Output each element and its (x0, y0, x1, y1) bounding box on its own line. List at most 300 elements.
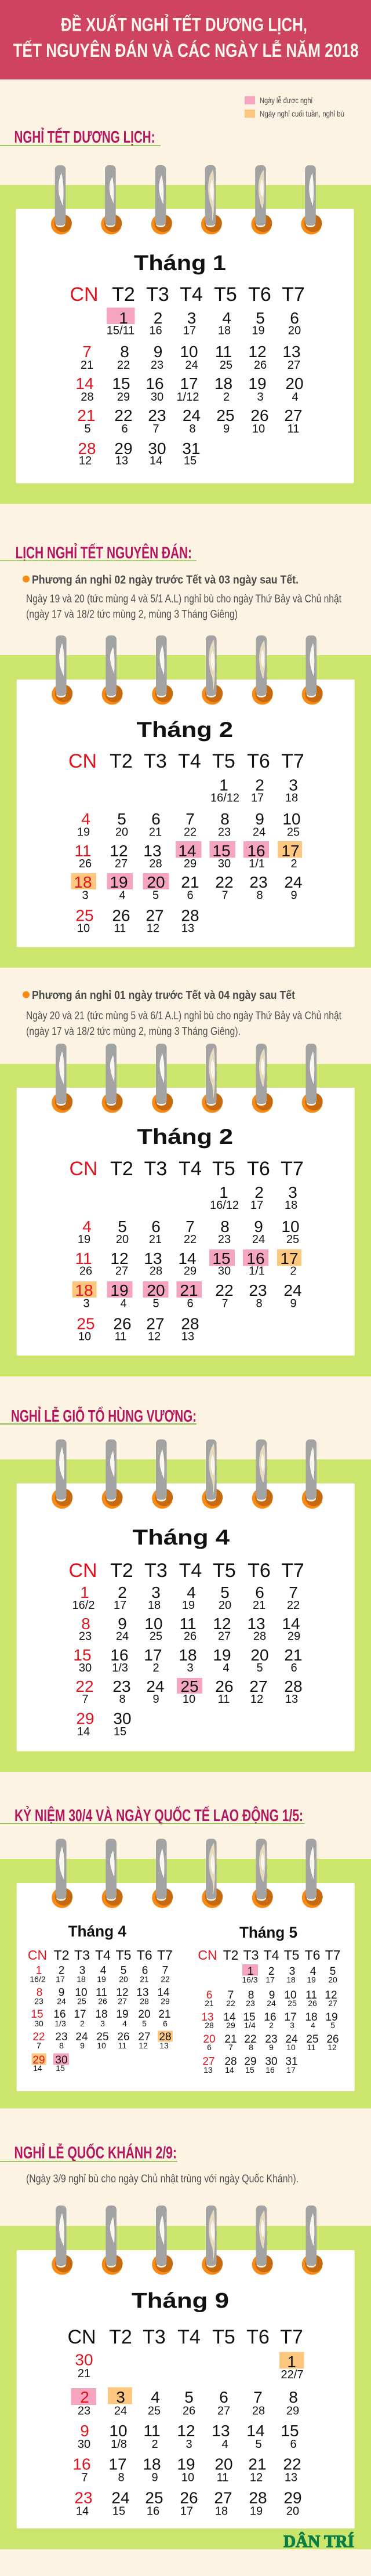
weekday header: T7 (282, 284, 305, 306)
date grid: 19 (97, 1975, 106, 1984)
weekday header: T7 (281, 750, 304, 772)
date grid: 21 (149, 826, 162, 838)
date grid: 7 (186, 1218, 195, 1236)
rings (51, 165, 322, 234)
date grid: 20 (147, 873, 165, 891)
date grid: 13 (181, 922, 194, 935)
date grid: 14 (178, 842, 197, 860)
date grid: 3 (289, 1965, 295, 1978)
date grid: 25 (286, 1233, 299, 1246)
date grid: 13 (136, 1986, 149, 1999)
date grid: 24 (146, 1677, 165, 1695)
date grid: 17 (180, 375, 198, 393)
date grid: 20 (219, 1599, 231, 1612)
date grid: 9 (254, 1218, 263, 1236)
weekday header: CN (67, 2326, 96, 2348)
date grid: 5 (142, 2019, 147, 2028)
date grid: 14 (282, 1615, 300, 1633)
date grid: 14 (246, 2422, 265, 2440)
date grid: 10 (78, 1330, 91, 1343)
date grid: 22 (244, 2033, 257, 2045)
date grid: 22 (226, 1999, 235, 2008)
date grid: 20 (285, 375, 304, 393)
date grid (72, 2350, 303, 2517)
date grid: 28 (159, 2031, 172, 2043)
weekday header: T4 (264, 1948, 279, 1963)
date grid: 23 (218, 1233, 231, 1246)
date grid: 30 (218, 858, 231, 870)
date grid: 2 (254, 1183, 264, 1201)
date grid: 30 (218, 1265, 231, 1278)
date grid: 13 (203, 2065, 213, 2074)
date grid: 31 (182, 439, 201, 457)
date grid: 30 (34, 2019, 43, 2028)
date grid (74, 776, 303, 935)
weekday header: T3 (243, 1948, 259, 1963)
date grid: 26 (183, 2405, 195, 2418)
date grid: 28 (140, 1997, 149, 2006)
date grid: 25 (306, 2033, 319, 2045)
date grid: 28 (224, 2056, 237, 2068)
date grid: 24 (111, 2488, 130, 2507)
date grid: 4 (223, 1662, 230, 1674)
date grid: 10 (77, 922, 90, 935)
date grid: 19 (116, 2008, 129, 2021)
date grid: 14 (178, 1249, 197, 1267)
date grid: 22 (161, 1975, 170, 1984)
date grid: 6 (255, 1583, 264, 1601)
date grid: 28 (205, 2021, 214, 2030)
date grid: 29 (161, 1997, 170, 2006)
date grid: 24 (285, 2033, 298, 2045)
date grid: 11 (74, 842, 92, 860)
date grid: 14 (150, 455, 162, 467)
date grid: 27 (115, 1265, 128, 1278)
date grid: 20 (288, 325, 301, 337)
date grid: 6 (151, 1218, 161, 1236)
option 2 text (23, 989, 342, 1038)
weekday header: T2 (54, 1948, 69, 1963)
heading: Lịch nghỉ Tết Nguyên đán: LỊCH NGHỈ TẾT NGUYÊN ĐÁN: (15, 543, 192, 562)
date grid: 26 (98, 1997, 107, 2006)
highlighted days (71, 2352, 304, 2405)
date grid: 2 (152, 1662, 159, 1674)
date grid: 10 (97, 2041, 106, 2050)
date grid: 8 (189, 423, 196, 435)
date grid: 3 (290, 2021, 294, 2030)
date grid: 21 (253, 1599, 265, 1612)
date grid: 16/3 (242, 1975, 258, 1985)
date grid: 5 (256, 1662, 263, 1674)
date grid: 17 (265, 1975, 275, 1985)
date grid: 11 (143, 2422, 161, 2440)
date grid: 13 (159, 2041, 169, 2050)
date grid: 26 (117, 2031, 130, 2043)
highlight: 25 April (177, 1678, 202, 1694)
date grid: 8 (59, 2041, 64, 2050)
date grid: 26 (79, 1265, 92, 1278)
date grid: 7 (253, 2388, 263, 2406)
date grid: 3 (116, 2388, 125, 2406)
date grid: 12 (250, 1693, 263, 1706)
date grid: 27 (218, 1630, 231, 1643)
weekday header: T5 (116, 1948, 131, 1963)
date grid: 10 (109, 2422, 128, 2440)
date grid: 23 (74, 2488, 93, 2507)
date grid: 30 (265, 2056, 278, 2068)
date grid: 12 (79, 455, 92, 467)
date grid: 15 (212, 1249, 231, 1267)
date grid: 29 (114, 439, 133, 457)
date grid: 19 (325, 2011, 338, 2023)
date grid: 16 (246, 1249, 265, 1267)
date grid: 18 (218, 325, 231, 337)
date grid: 27 (284, 406, 303, 424)
date grid: 19 (213, 1646, 231, 1664)
date grid: 21 (248, 2455, 267, 2473)
date grid: 9 (59, 1986, 64, 1999)
date grid: 11 (75, 1249, 92, 1267)
date grid: 23 (34, 1997, 43, 2006)
weekday header: CN (28, 1948, 47, 1963)
date grid: 16/12 (210, 792, 239, 805)
date grid: 9 (152, 1693, 159, 1706)
date grid: 13 (285, 2471, 297, 2484)
date grid: 27 (217, 2405, 230, 2418)
heading: Nghỉ Tết Dương lịch: NGHỈ TẾT DƯƠNG LỊCH: (14, 127, 155, 147)
date grid: 6 (121, 423, 128, 435)
date grid: 23 (112, 1677, 131, 1695)
date grid: 2 (151, 2438, 158, 2451)
date grid: 23 (249, 873, 268, 891)
date grid: 12 (325, 1989, 337, 2001)
date grid: 28 (78, 439, 96, 457)
weekday header: CN (70, 284, 99, 306)
date grid: 23 (265, 2033, 278, 2045)
date grid: 7 (162, 1964, 168, 1977)
date grid: 3 (187, 1662, 194, 1674)
weekday header: T5 (212, 2326, 235, 2348)
date grid: 30 (78, 2438, 90, 2451)
date grid: 21 (158, 2008, 171, 2021)
date grid: 21 (77, 406, 96, 424)
date grid: 18 (285, 792, 298, 805)
date grid: 1 (287, 2353, 296, 2371)
date grid: 24 (57, 1997, 66, 2006)
date grid: 19 (252, 325, 265, 337)
option 1 text: (ngày 17 và 18/2 tức mùng 2, mùng 3 Tháng Giêng) (26, 609, 238, 620)
date grid: 26 (184, 1630, 197, 1643)
date grid: 13 (201, 2011, 214, 2023)
legend (245, 96, 344, 118)
date grid: 2 (290, 1265, 297, 1278)
highlighted days (71, 841, 302, 889)
date grid: 20 (147, 1281, 165, 1299)
date grid: 2 (255, 776, 264, 794)
date grid: 11 (307, 2043, 315, 2052)
date grid: 22 (215, 1281, 234, 1299)
weekday header: T4 (180, 284, 203, 306)
weekday header: CN (69, 1158, 98, 1180)
date grid: 31 (285, 2056, 298, 2068)
date grid: 30 (55, 2054, 68, 2066)
date grid: 5 (330, 2021, 335, 2030)
date grid: 18 (286, 1975, 296, 1985)
date grid: 25 (77, 1315, 95, 1332)
date grid: 9 (269, 1989, 275, 2001)
date grid: 10 (282, 810, 301, 828)
date grid: 12 (110, 1249, 129, 1267)
date grid: 11 (288, 423, 299, 435)
date grid: 12 (248, 343, 267, 361)
date grid: 1/3 (112, 1662, 128, 1674)
note: National Day compensation: (Ngày 3/9 nghỉ bù cho ngày Chủ nhật trùng với ngày Quốc Khánh). (26, 2173, 299, 2185)
date grid: 29 (244, 2056, 257, 2068)
date grid: 8 (118, 2471, 125, 2484)
date grid: 13 (285, 1693, 298, 1706)
date grid: 15 (245, 2065, 254, 2074)
date grid: 11 (96, 1986, 107, 1999)
date grid: 23 (148, 406, 166, 424)
date grid: 28 (181, 907, 199, 924)
date grid: 27 (214, 2488, 232, 2507)
date grid: 15 (112, 375, 130, 393)
weekday header (68, 750, 304, 772)
date grid: 24 (116, 1630, 129, 1643)
date grid: 8 (37, 1986, 42, 1999)
date grid (75, 1183, 302, 1343)
date grid: 11 (217, 2471, 228, 2484)
date grid: 25 (180, 1677, 199, 1695)
date grid: 12 (213, 1615, 231, 1633)
date grid: 5 (152, 889, 159, 902)
date grid: 7 (81, 2471, 88, 2484)
date grid: 2 (290, 858, 297, 870)
date grid: 5 (117, 810, 126, 828)
date grid: 5 (152, 1298, 159, 1310)
date grid: 10 (183, 1693, 195, 1706)
date grid: 2 (154, 309, 162, 327)
date grid: 29 (117, 391, 130, 404)
date grid: 19 (307, 1975, 316, 1985)
date grid: 11 (179, 1615, 197, 1633)
date grid: 30 (79, 1662, 92, 1674)
date grid: 5 (255, 2438, 262, 2451)
date grid: 5 (121, 1964, 126, 1977)
date grid: 7 (228, 1989, 234, 2001)
date grid: 9 (154, 343, 162, 361)
date grid: 3 (288, 1183, 297, 1201)
date grid: 25 (75, 907, 94, 924)
weekday header: T7 (157, 1948, 173, 1963)
date grid: 16 (53, 2008, 66, 2021)
date grid: 19 (110, 873, 128, 891)
date grid: 22 (287, 1599, 300, 1612)
date grid: 21 (149, 1233, 162, 1246)
date grid: 19 (177, 2455, 195, 2473)
date grid: 3 (151, 1583, 161, 1601)
date grid: 16 (265, 2065, 275, 2074)
date grid: 15 (31, 2008, 43, 2021)
date grid: 29 (76, 1709, 94, 1728)
date grid: 27 (146, 1315, 165, 1332)
date grid: 6 (290, 309, 299, 327)
weekday header: T2 (110, 1158, 133, 1180)
date grid: 8 (220, 810, 230, 828)
weekday header: T3 (143, 2326, 166, 2348)
date grid: 2 (80, 2388, 89, 2406)
weekday header: CN (198, 1948, 217, 1963)
weekday header: T6 (137, 1948, 152, 1963)
date grid: 11 (215, 343, 232, 361)
date grid: 17 (144, 1646, 162, 1664)
date grid: 10 (284, 1989, 297, 2001)
date grid: 16/12 (210, 1199, 239, 1212)
date grid: 20 (203, 2033, 216, 2045)
weekday header: CN (68, 750, 97, 772)
date grid: 26 (308, 1999, 317, 2008)
date grid: 6 (142, 1964, 148, 1977)
date grid: 12 (250, 2471, 263, 2484)
date grid: 18 (214, 375, 232, 393)
date grid: 20 (286, 2505, 299, 2517)
date grid: 30 (75, 2350, 93, 2369)
date grid: 7 (221, 889, 228, 902)
date grid: 14 (223, 2011, 236, 2023)
option 1 text: Phương án nghỉ 02 ngày trước Tết và 03 ngày sau Tết. (32, 574, 299, 587)
date grid: 15 (243, 2011, 256, 2023)
month title: Tháng 2 (137, 718, 233, 742)
date grid: 11 (114, 922, 126, 935)
date grid: 21 (205, 1999, 214, 2008)
date grid: 3 (100, 2019, 105, 2028)
date grid: 4 (222, 309, 231, 327)
date grid: 26 (326, 2033, 339, 2045)
date grid: 22 (75, 1677, 94, 1695)
date grid: 11 (115, 1330, 126, 1343)
date grid: 1 (219, 776, 228, 794)
option 1 text (23, 574, 342, 620)
date grid: 20 (119, 1975, 128, 1984)
date grid: 24 (183, 406, 201, 424)
date grid: 18 (95, 2008, 108, 2021)
date grid: 3 (79, 1964, 85, 1977)
date grid: 26 (180, 2488, 198, 2507)
date grid: 27 (249, 1677, 268, 1695)
weekday header: CN (68, 1560, 97, 1582)
option 2 text: (ngày 17 và 18/2 tức mùng 2, mùng 3 Tháng Giêng). (26, 1026, 241, 1038)
date grid: 10 (286, 2043, 296, 2052)
date grid: 13 (247, 1615, 265, 1633)
date grid: 10 (180, 343, 198, 361)
date grid: 7 (82, 343, 92, 361)
date grid: 5 (256, 309, 265, 327)
date grid: 8 (81, 1615, 90, 1633)
date grid: 10 (181, 2471, 194, 2484)
date grid: 21 (224, 2033, 237, 2045)
date grid: 16 (264, 2011, 277, 2023)
month title: Tháng 5 (239, 1924, 297, 1941)
date grid: 4 (151, 2388, 160, 2406)
highlight: 1 January (107, 307, 134, 324)
date grid: 24 (114, 2405, 127, 2418)
weekday header (28, 1948, 173, 1963)
date grid: 23 (78, 2405, 90, 2418)
date grid: 15 (184, 455, 197, 467)
heading: Nghỉ lễ Giỗ Tổ Hùng Vương: NGHỈ LỄ GIỖ TỔ HÙNG VƯƠNG: (11, 1406, 197, 1426)
date grid: 22 (114, 406, 133, 424)
date grid: 18 (285, 1199, 297, 1212)
date grid: 19 (182, 1599, 195, 1612)
date grid: 13 (181, 1330, 194, 1343)
date grid: 29 (184, 858, 197, 870)
date grid: 6 (151, 810, 161, 828)
date grid: 9 (255, 810, 264, 828)
date grid: 14 (225, 2065, 234, 2074)
date grid: 20 (138, 2008, 151, 2021)
weekday header: T2 (110, 1560, 133, 1582)
date grid: 8 (120, 343, 129, 361)
date grid: 27 (328, 1999, 337, 2008)
date grid: 11 (218, 1693, 230, 1706)
date grid: 12 (147, 922, 159, 935)
date grid: 1/3 (54, 2019, 66, 2028)
date grid: 22 (215, 873, 234, 891)
highlighted days (72, 1249, 301, 1298)
date grid: 5 (84, 423, 91, 435)
date grid: 18 (179, 1646, 197, 1664)
weekday header: T3 (144, 1560, 168, 1582)
date grid: 24 (283, 1281, 302, 1299)
weekday header: T2 (109, 2326, 132, 2348)
date grid: 1/4 (244, 2021, 256, 2030)
date grid: 23 (249, 1281, 267, 1299)
date grid: 15 (114, 1725, 126, 1738)
date grid: 13 (115, 455, 128, 467)
date grid: 6 (207, 2043, 212, 2052)
date grid: 21 (140, 1975, 149, 1984)
panel: September calendar (0, 2206, 371, 2551)
weekday header: T7 (325, 1948, 340, 1963)
date grid: 1/1 (249, 1265, 265, 1278)
rings (52, 1440, 323, 1509)
date grid: 29 (286, 2405, 299, 2418)
panel: April and May calendars (0, 1839, 371, 2108)
date grid: 4 (81, 810, 90, 828)
date grid: 26 (79, 858, 92, 870)
date grid: 20 (214, 2455, 233, 2473)
date grid (72, 1583, 303, 1738)
date grid: 12 (110, 842, 128, 860)
date grid: 9 (80, 2422, 89, 2440)
panel: February calendar, option 2 (0, 1044, 371, 1376)
date grid: 5 (330, 1965, 336, 1978)
date grid: 5 (118, 1218, 127, 1236)
weekday header: T4 (177, 2326, 201, 2348)
date grid: 21 (284, 1646, 303, 1664)
highlight: 1 May (242, 1964, 258, 1976)
date grid: 18 (143, 2455, 161, 2473)
date grid: 27 (288, 359, 300, 372)
weekday header: T4 (179, 1158, 202, 1180)
date grid: 27 (146, 907, 164, 924)
date grid: 28 (253, 1630, 266, 1643)
date grid: 9 (290, 1298, 297, 1310)
date grid: 7 (186, 810, 195, 828)
date grid: 30 (151, 391, 163, 404)
month title: Tháng 1 (134, 251, 226, 275)
date grid: 28 (150, 1265, 162, 1278)
